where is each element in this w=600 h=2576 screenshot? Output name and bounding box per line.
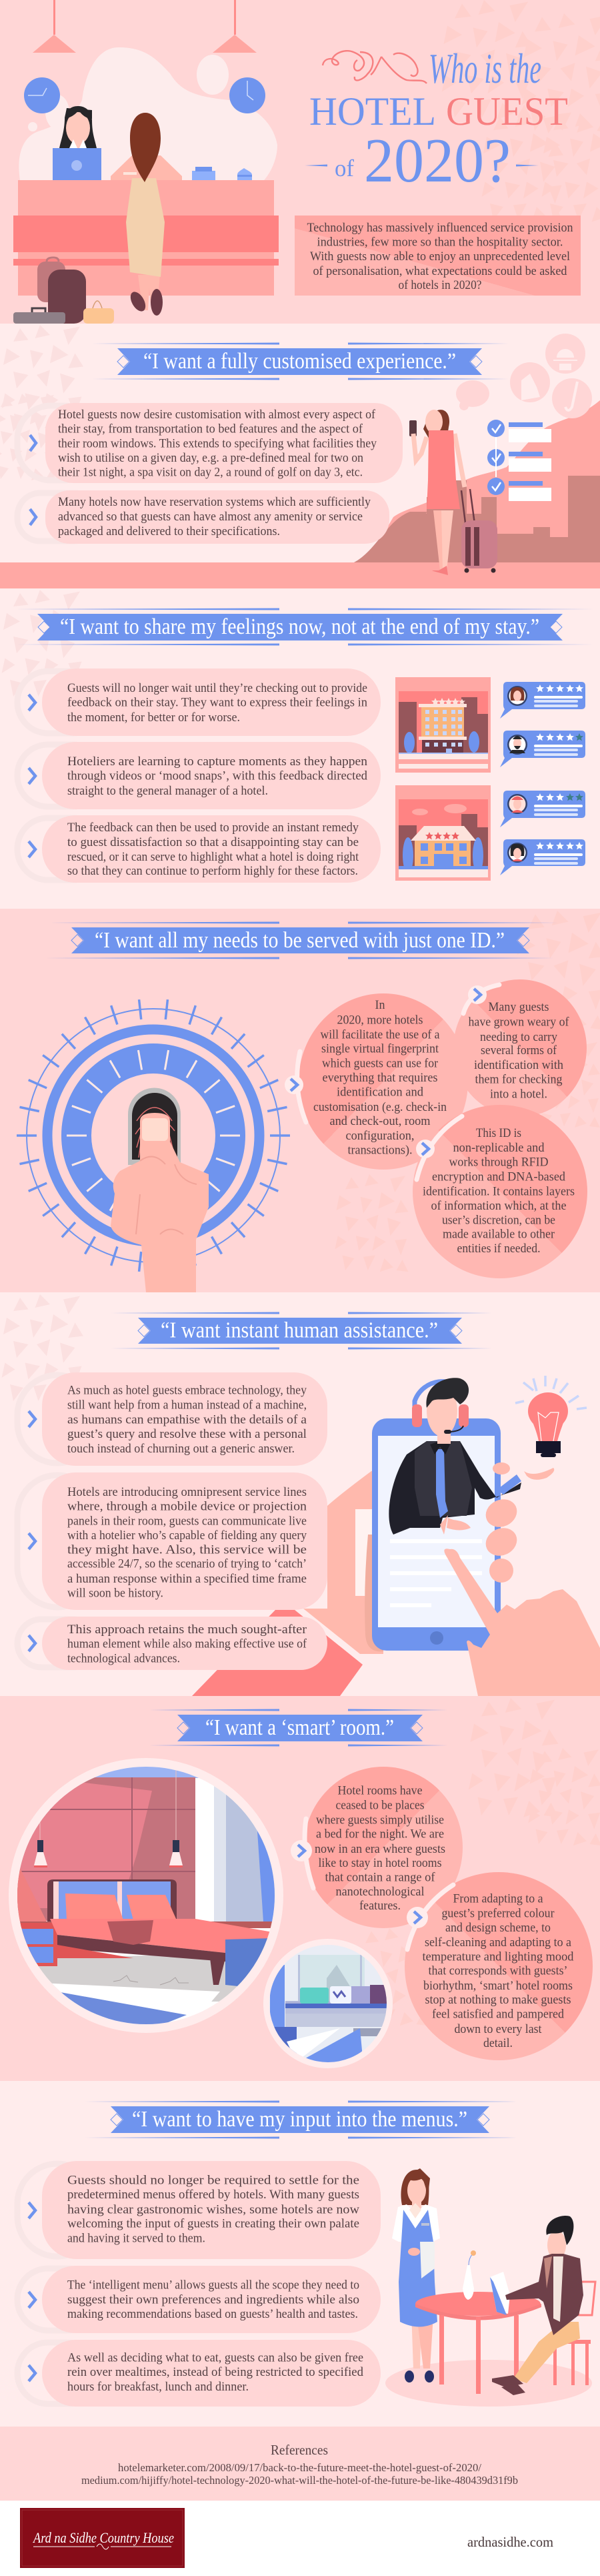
text circle: RFID encryption [413, 1105, 587, 1278]
logo: Ard na Sidhe Country House: Ard na Sidhe Country House [32, 2529, 174, 2546]
heading: human assistance: “I want instant human assistance.” [161, 1318, 438, 1342]
text bubble: mealtimes [17, 2340, 381, 2407]
text bubble: reservation systems [17, 490, 389, 544]
text bubble: sought-after human element: human element while also making effective use of [67, 1637, 307, 1651]
panel: footer: ardnasidhe.com [467, 2534, 553, 2550]
text bubble: reservation systems: packaged and delivered to their specifications. [58, 524, 280, 538]
heading: share feelings: “I want to share my feelings now, not at the end of my stay.” [60, 614, 539, 639]
text circle: adapting to guests: self-cleaning and adapting to a [425, 1936, 572, 1950]
text circle: adapting to guests: stop at nothing to make guests [425, 1993, 571, 2007]
title: GUEST [446, 89, 568, 133]
text circle: nanotechnology: that contain a range of [325, 1870, 435, 1884]
text bubble: omnipresent service lines: Hotels are introducing omnipresent service lines [67, 1485, 307, 1499]
illustration: reception desk scene [13, 0, 279, 316]
panel: customised experience [0, 324, 600, 909]
text bubble: instant remedy: rescued, or it can serve to highlight what a hotel is doing right [67, 850, 359, 864]
text circle: weary of identification: have grown weary of [468, 1015, 569, 1029]
text bubble: customisation: their room windows. This extends to specifying what facilities they [58, 436, 377, 451]
text block: introduction: of hotels in 2020? [399, 278, 481, 292]
text circle: single fingerprint: transactions). [348, 1144, 412, 1157]
text circle: nanotechnology: where guests simply utilise [316, 1813, 444, 1827]
title: of [335, 155, 354, 181]
text bubble: mealtimes: As well as deciding what to eat, guests can also be given free [67, 2351, 363, 2365]
text circle: adapting to guests: down to every last [455, 2022, 542, 2036]
text circle: nanotechnology: a bed for the night. We are [316, 1827, 444, 1841]
text circle: single fingerprint: everything that requires [323, 1071, 437, 1085]
text circle: nanotechnology: ceased to be places [336, 1798, 424, 1812]
text bubble: instant remedy: so that they can continue to perform highly for these factors. [67, 864, 358, 878]
text circle: RFID encryption: made available to other [443, 1228, 555, 1242]
illustration: waitress serving seated guest [385, 2168, 595, 2407]
text bubble: feedback timing: feedback on their stay. They want to express their feelings in [67, 695, 367, 710]
text bubble: customisation: wish to utilise on a given day, e.g. a pre-defined meal for two on [58, 451, 363, 465]
text circle: single fingerprint: customisation (e.g. check-in [313, 1100, 447, 1114]
heading: one ID: “I want all my needs to be served with just one ID.” [95, 928, 505, 953]
text circle: weary of identification: needing to carry [480, 1030, 557, 1044]
text bubble: reservation systems: advanced so that guests can have almost any amenity or service [58, 510, 363, 524]
heading: human assistance [111, 1312, 492, 1349]
text bubble: help from a human: still want help from a human instead of a machine, [67, 1398, 307, 1412]
text bubble: intelligent menu: The ‘intelligent menu’ allows guests all the scope they need to [67, 2278, 359, 2292]
text circle: weary of identification: Many guests [488, 1000, 549, 1014]
text block: introduction [295, 216, 581, 296]
heading: customised experience: “I want a fully customised experience.” [143, 349, 456, 374]
panel: references [0, 2427, 600, 2501]
text bubble: mealtimes: hours for breakfast, lunch and dinner. [67, 2380, 249, 2394]
illustration: phone with live assistant held in hands [192, 1376, 600, 1696]
heading: menus [84, 2100, 517, 2139]
panel: menus [0, 2081, 600, 2427]
icon: ornament flourish [323, 51, 427, 83]
text bubble: sought-after human element: technological advances. [67, 1651, 180, 1665]
icon: three star review [500, 791, 585, 827]
text bubble: help from a human: touch instead of churning out a generic answer. [67, 1442, 295, 1456]
panel: references: References [271, 2442, 328, 2458]
icon: four star review [500, 731, 585, 767]
icon: five star review [500, 682, 585, 719]
text circle: RFID encryption: This ID is [476, 1126, 521, 1140]
text bubble: predetermined menus: and having it served to them. [67, 2231, 205, 2245]
text circle: RFID encryption: works through RFID [449, 1156, 548, 1169]
text bubble: omnipresent service lines: accessible 24/7, so the scenario of trying to ‘catch’ [67, 1557, 307, 1571]
text bubble: customisation [17, 403, 403, 483]
text bubble: mood snaps: Hoteliers are learning to capture moments as they happen [67, 755, 368, 769]
text block: introduction: of personalisation, what expectations could be asked [313, 264, 567, 278]
text circle: RFID encryption: non-replicable and [453, 1141, 545, 1155]
text bubble: predetermined menus [17, 2161, 381, 2259]
text circle: nanotechnology: now in an era where guests [315, 1842, 445, 1856]
text bubble: feedback timing: the moment, for better or for worse. [67, 711, 240, 725]
text circle: weary of identification: into a hotel. [490, 1087, 547, 1101]
text circle: RFID encryption: of information which, at the [431, 1199, 567, 1213]
text bubble: omnipresent service lines: with a hotelier who’s capable of fielding any query [67, 1529, 307, 1543]
text circle: adapting to guests: From adapting to a [453, 1891, 543, 1905]
text bubble: instant remedy: to guest dissatisfaction so that a disappointing stay can be [67, 835, 359, 849]
illustration: window seat circle [263, 1939, 393, 2068]
text block: introduction: industries, few more so than the hospitality sector. [317, 235, 563, 250]
text circle: single fingerprint: In [375, 998, 385, 1012]
text bubble: predetermined menus: predetermined menus offered by hotels. With many guests [67, 2188, 359, 2202]
text bubble: omnipresent service lines: they might have. Also, this service will be [67, 1543, 307, 1557]
logo: Ard na Sidhe Country House [20, 2508, 185, 2568]
panel: human assistance [0, 1292, 600, 1696]
text circle: single fingerprint: will facilitate the use of a [320, 1027, 440, 1041]
panel: references: medium.com/hijiffy/hotel-technology-2020-what-will-the-hotel-of-the-future-be-like-480439d31f9b [81, 2474, 518, 2487]
text block: introduction: With guests now able to enjoy an unprecedented level [310, 250, 570, 264]
text circle: single fingerprint: single virtual fingerprint [321, 1042, 439, 1056]
title: 2020? [364, 126, 511, 195]
heading: share feelings [15, 608, 593, 646]
panel: references: hotelemarketer.com/2008/09/17/back-to-the-future-meet-the-hotel-guest-of-2020/ [118, 2461, 481, 2474]
illustration: city hills and guest with checklist [0, 334, 600, 588]
heading: one ID [45, 922, 559, 959]
heading: customised experience [92, 343, 513, 380]
text bubble: predetermined menus: Guests should no longer be required to settle for the [67, 2173, 359, 2187]
text circle: adapting to guests: feel satisfied and pampered [432, 2008, 564, 2022]
text bubble: omnipresent service lines: will soon be history. [67, 1587, 163, 1601]
panel: smart room [0, 1696, 600, 2081]
illustration: fingerprint scanner with hand [17, 999, 290, 1292]
icon: luggage [13, 258, 114, 324]
text bubble: feedback timing [17, 669, 381, 736]
text circle: nanotechnology: features. [359, 1899, 401, 1913]
text bubble: sought-after human element [17, 1617, 327, 1670]
illustration: tall hotel card [395, 677, 491, 773]
text circle: weary of identification [453, 979, 587, 1117]
panel: intro hero [0, 0, 600, 324]
text bubble: help from a human: as humans can empathise with the details of a [67, 1413, 307, 1427]
text circle: single fingerprint: and check-out, room [329, 1114, 431, 1128]
text circle: weary of identification: identification with [474, 1058, 563, 1072]
title: HOTEL [309, 89, 436, 133]
text bubble: mealtimes: rein over mealtimes, instead of being restricted to specified [67, 2365, 363, 2379]
text circle: adapting to guests: biorhythm, ‘smart’ hotel rooms [423, 1979, 573, 1993]
text bubble: omnipresent service lines: panels in their room, guests can communicate live [67, 1515, 307, 1529]
text bubble: predetermined menus: welcoming the input of guests in creating their own palate [67, 2217, 359, 2231]
text bubble: intelligent menu: suggest their own preferences and ingredients while also [67, 2292, 359, 2307]
text bubble: help from a human [17, 1372, 327, 1466]
text circle: weary of identification: them for checking [475, 1072, 563, 1086]
text bubble: omnipresent service lines: a human response within a specified time frame [67, 1572, 307, 1586]
text bubble: customisation: Hotel guests now desire customisation with almost every aspect of [58, 408, 376, 422]
text bubble: sought-after human element: This approach retains the much sought-after [67, 1623, 307, 1637]
text bubble: mood snaps [17, 742, 381, 809]
text circle: nanotechnology: Hotel rooms have [337, 1783, 423, 1797]
text circle: RFID encryption: entities if needed. [457, 1242, 540, 1256]
text circle: single fingerprint: configuration, [345, 1129, 415, 1143]
text circle: single fingerprint: which guests can use for [322, 1057, 439, 1071]
illustration: low hotel card [395, 785, 491, 881]
text circle: RFID encryption: identification. It contains layers [423, 1185, 575, 1198]
text circle: adapting to guests: guest’s preferred colour [441, 1907, 555, 1921]
text bubble: instant remedy: The feedback can then be used to provide an instant remedy [67, 821, 359, 835]
text circle: single fingerprint: identification and [337, 1086, 423, 1100]
text bubble: predetermined menus: having clear gastronomic wishes, some hotels are now [67, 2202, 359, 2216]
panel: share feelings [15, 608, 593, 883]
text bubble: omnipresent service lines: where, through a mobile device or projection [67, 1500, 307, 1514]
text bubble: reservation systems: Many hotels now have reservation systems which are sufficiently [58, 495, 371, 509]
icon: second five star review [500, 839, 585, 875]
text bubble: customisation: their 1st night, a spa visit on day 2, a round of golf on day 3, etc. [58, 466, 363, 479]
text bubble: feedback timing: Guests will no longer wait until they’re checking out to provide [67, 681, 367, 695]
text circle: nanotechnology [291, 1767, 463, 1928]
text circle: single fingerprint: 2020, more hotels [337, 1013, 423, 1027]
title [305, 45, 568, 195]
text circle: nanotechnology: nanotechnological [336, 1885, 424, 1899]
text circle: adapting to guests: that corresponds with guests’ [428, 1964, 568, 1978]
panel: one ID [0, 909, 600, 1292]
text bubble: intelligent menu [17, 2266, 381, 2333]
text block: introduction: Technology has massively influenced service provision [307, 221, 573, 235]
text bubble: intelligent menu: making recommendations based on guests’ health and tastes. [67, 2307, 358, 2321]
text circle: nanotechnology: like to stay in hotel rooms [319, 1856, 441, 1870]
text circle: RFID encryption: user’s discretion, can be [442, 1213, 555, 1227]
text circle: adapting to guests [405, 1872, 593, 2060]
text bubble: mood snaps: straight to the general manager of a hotel. [67, 784, 268, 798]
text bubble: mood snaps: through videos or ‘mood snaps’, with this feedback directed [67, 769, 367, 783]
illustration: bedroom circle [9, 1758, 283, 2035]
text bubble: help from a human: As much as hotel guests embrace technology, they [67, 1384, 307, 1398]
text bubble: instant remedy [17, 815, 381, 883]
panel: footer [0, 2501, 600, 2576]
text bubble: omnipresent service lines [17, 1472, 327, 1610]
heading: smart room: “I want a ‘smart’ room.” [205, 1715, 394, 1740]
heading: smart room [149, 1709, 448, 1747]
text circle: single fingerprint [285, 993, 468, 1170]
heading: menus: “I want to have my input into the menus.” [132, 2107, 467, 2132]
text circle: RFID encryption: encryption and DNA-based [432, 1170, 565, 1184]
text circle: adapting to guests: temperature and lighting mood [423, 1950, 574, 1964]
text bubble: help from a human: guest’s query and resolve these with a personal [67, 1427, 307, 1441]
text bubble: customisation: their stay, from transportation to bed features and the aspect of [58, 422, 363, 436]
text circle: weary of identification: several forms of [481, 1043, 557, 1057]
text circle: adapting to guests: detail. [483, 2036, 513, 2050]
text circle: adapting to guests: and design scheme, to [445, 1921, 551, 1935]
